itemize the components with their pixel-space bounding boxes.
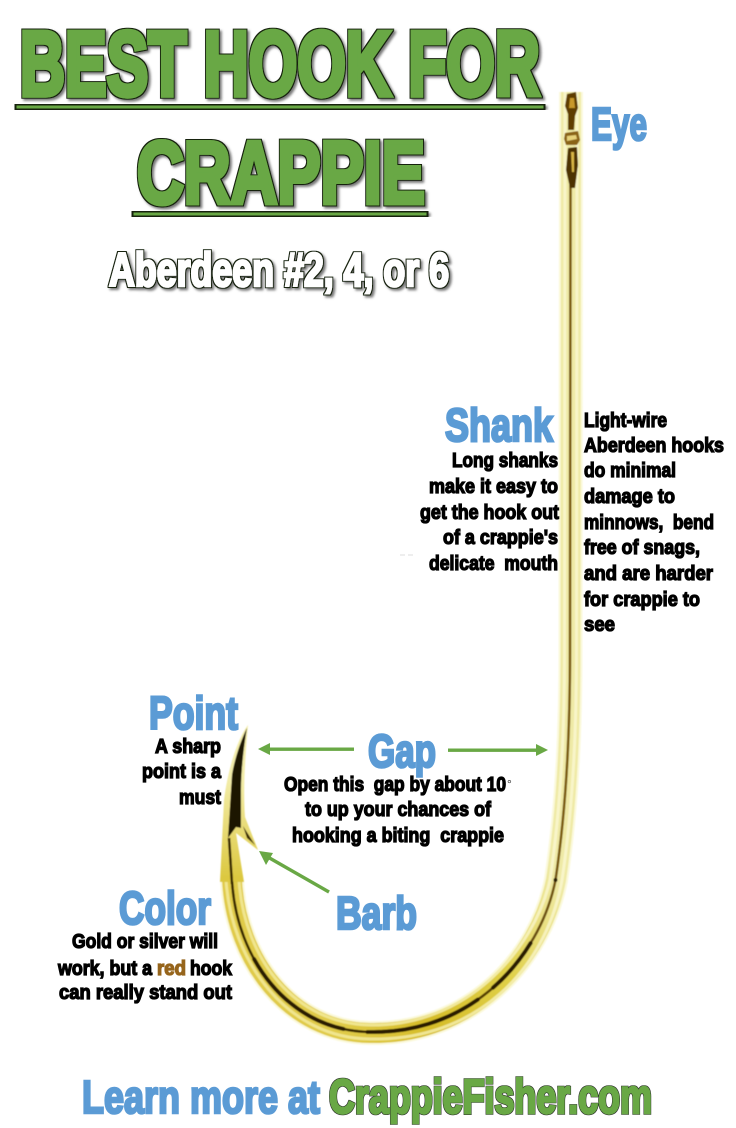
shank description: Long shanks bbox=[452, 449, 558, 472]
title line 2: CRAPPIE bbox=[137, 123, 425, 222]
gap description: to up your chances of bbox=[305, 798, 491, 821]
hook eye bbox=[564, 92, 580, 188]
gap description: hooking a biting crappie bbox=[292, 824, 504, 847]
title line 1 underline bbox=[16, 105, 544, 109]
point description: A sharp bbox=[155, 735, 221, 758]
gap description bbox=[284, 773, 512, 847]
point description bbox=[142, 735, 222, 809]
hook illustration bbox=[220, 92, 580, 1039]
gap heading: Gap bbox=[368, 725, 436, 777]
color heading: Color bbox=[119, 882, 211, 934]
panel: gap bbox=[258, 725, 548, 847]
panel: barb bbox=[259, 851, 417, 939]
hook wire body bbox=[226, 92, 577, 1039]
panel: shank bbox=[420, 399, 559, 575]
label: eye: Eye bbox=[591, 98, 647, 150]
text block: light-wire note: and are harder bbox=[584, 562, 713, 585]
arrow: barb bbox=[259, 851, 329, 892]
text block: light-wire note: do minimal bbox=[584, 459, 676, 482]
color description: red bbox=[157, 957, 186, 980]
gap description: ° bbox=[507, 777, 512, 791]
title bbox=[16, 14, 544, 222]
arrow: gap right bbox=[448, 744, 548, 756]
color description: work, but a bbox=[57, 957, 153, 980]
title line 2 underline bbox=[133, 212, 427, 216]
color description: Gold or silver will bbox=[72, 930, 218, 953]
text block: light-wire note: Light-wire bbox=[584, 409, 667, 432]
shank heading: Shank bbox=[445, 399, 553, 451]
shank description bbox=[420, 449, 559, 575]
panel: color bbox=[57, 882, 233, 1004]
shank description: make it easy to bbox=[429, 475, 558, 498]
barb heading: Barb bbox=[336, 887, 417, 939]
shank description: get the hook out bbox=[420, 501, 559, 524]
text block: light-wire note: minnows, bend bbox=[584, 511, 714, 534]
text block: light-wire note: damage to bbox=[584, 485, 675, 508]
shank description: delicate mouth bbox=[429, 552, 558, 575]
panel: point bbox=[142, 687, 238, 809]
hook point and barb bbox=[220, 725, 258, 884]
text block: light-wire note: for crappie to bbox=[584, 588, 700, 611]
point description: must bbox=[179, 786, 221, 809]
color description: hook bbox=[190, 957, 233, 980]
text block: light-wire note bbox=[584, 409, 724, 636]
color description: can really stand out bbox=[59, 981, 232, 1004]
arrow: gap left bbox=[258, 743, 354, 755]
color description bbox=[57, 930, 233, 1004]
text block: light-wire note: free of snags, bbox=[584, 536, 700, 559]
footer lead-in text: Learn more at bbox=[82, 1071, 320, 1123]
point description: point is a bbox=[142, 760, 222, 783]
shank description: of a crappie's bbox=[443, 526, 558, 549]
subtitle: Aberdeen #2, 4, or 6 bbox=[109, 243, 449, 296]
text block: light-wire note: see bbox=[584, 613, 615, 636]
footer bbox=[82, 1071, 652, 1124]
point heading: Point bbox=[149, 687, 238, 739]
gap description: Open this gap by about 10 bbox=[284, 773, 506, 796]
